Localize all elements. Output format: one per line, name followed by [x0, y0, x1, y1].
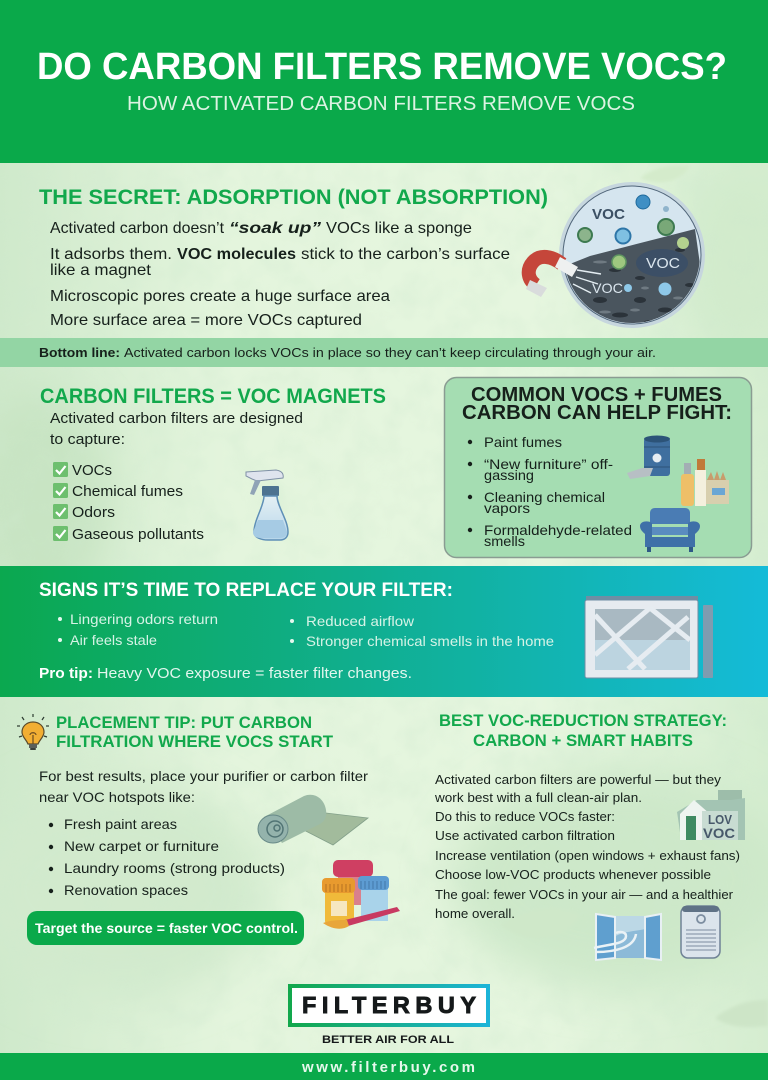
bullet list: Formaldehyde-related — [484, 522, 632, 538]
text block: “soak up” — [229, 220, 321, 237]
panel: best voc-reduction strategy — [434, 712, 745, 960]
bullet list: smells — [484, 533, 525, 549]
text block: Choose low-VOC products whenever possible — [435, 867, 711, 882]
heading: SIGNS IT’S TIME TO REPLACE YOUR FILTER: — [39, 580, 453, 601]
callout: target the source: Target the source = faster VOC control. — [35, 920, 298, 936]
icon: armchair — [640, 508, 700, 552]
bullet list: Paint fumes — [484, 434, 562, 450]
bullet list: gassing — [484, 467, 534, 483]
text block: Do this to reduce VOCs faster: — [435, 809, 615, 824]
icon: VOC magnet disc: VOC — [592, 206, 625, 223]
heading: FILTRATION WHERE VOCS START — [56, 733, 333, 751]
heading: COMMON VOCS + FUMES — [471, 384, 722, 406]
icon: VOC magnet disc — [526, 182, 710, 335]
panel: the secret adsorption — [0, 182, 768, 367]
logo — [290, 986, 488, 1046]
icon: VOC magnet disc: VOC — [592, 280, 623, 296]
text block: Microscopic pores create a huge surface area — [50, 288, 390, 305]
text block: Activated carbon filters are designed — [50, 410, 303, 427]
logo: BETTER AIR FOR ALL — [322, 1034, 454, 1046]
bullet list: Lingering odors return — [70, 611, 218, 627]
callout: bottom line: Bottom line: — [39, 345, 120, 360]
checklist — [53, 462, 204, 543]
bullet list — [468, 434, 632, 549]
callout: pro tip: Pro tip: — [39, 665, 93, 682]
magnet — [526, 257, 578, 297]
panel: voc magnets — [40, 385, 386, 543]
text block: Activated carbon doesn’t — [50, 220, 225, 237]
icon: chemical drum — [627, 436, 670, 479]
icon: VOC magnet disc: VOC — [646, 255, 680, 272]
text block: Use activated carbon filtration — [435, 828, 615, 843]
text block: More surface area = more VOCs captured — [50, 312, 362, 329]
bullet list: Cleaning chemical — [484, 489, 605, 505]
panel: common VOCs and fumes — [444, 378, 752, 558]
text block: For best results, place your purifier or carbon filter — [39, 768, 368, 784]
text block: Activated carbon filters are powerful — but they — [435, 772, 722, 787]
icon: air purifier — [681, 906, 720, 958]
text block: VOC molecules — [177, 246, 296, 263]
bullet list — [49, 816, 285, 898]
bullet list: Air feels stale — [70, 632, 157, 648]
heading: BEST VOC-REDUCTION STRATEGY: — [439, 712, 727, 730]
icon: low VOC house — [677, 790, 745, 841]
bullet list: “New furniture” off- — [484, 456, 613, 472]
heading — [462, 384, 732, 424]
heading — [56, 714, 333, 751]
bullet list: Reduced airflow — [306, 613, 415, 629]
heading: PLACEMENT TIP: PUT CARBON — [56, 714, 312, 732]
bullet list — [58, 611, 554, 649]
text block — [39, 768, 368, 805]
text block — [434, 772, 740, 921]
heading: THE SECRET: ADSORPTION (NOT ABSORPTION) — [39, 186, 548, 209]
callout: bottom line: Activated carbon locks VOCs in place so they can’t keep circulating through your air. — [124, 345, 656, 360]
bullet list: Renovation spaces — [64, 882, 188, 898]
icon: paint jars and brush — [322, 860, 400, 929]
checklist: Chemical fumes — [72, 483, 183, 500]
heading: CARBON FILTERS = VOC MAGNETS — [40, 385, 386, 408]
title: DO CARBON FILTERS REMOVE VOCS? — [37, 46, 727, 88]
icon: cleaning bottles — [681, 459, 729, 506]
callout: target the source — [27, 911, 304, 945]
heading: CARBON CAN HELP FIGHT: — [462, 402, 732, 424]
bullet list: Stronger chemical smells in the home — [306, 633, 554, 649]
checklist: Gaseous pollutants — [72, 526, 204, 543]
text block — [50, 410, 303, 448]
text block: work best with a full clean-air plan. — [434, 790, 642, 805]
text block: VOCs like a sponge — [326, 220, 472, 237]
text block: It adsorbs them. — [50, 246, 172, 263]
heading — [439, 712, 727, 750]
text block: stick to the carbon’s surface — [301, 246, 510, 263]
bullet list: Laundry rooms (strong products) — [64, 860, 285, 876]
callout: pro tip: Heavy VOC exposure = faster filter changes. — [97, 665, 412, 682]
bullet list: vapors — [484, 500, 530, 516]
checklist: VOCs — [72, 462, 112, 479]
icon: light bulb — [17, 714, 49, 750]
bullet list: Fresh paint areas — [64, 816, 177, 832]
icon: open window — [594, 914, 661, 960]
text block: Increase ventilation (open windows + exhaust fans) — [435, 848, 740, 863]
header band — [0, 0, 768, 163]
text block: near VOC hotspots like: — [39, 789, 195, 805]
panel: placement tip — [17, 714, 400, 945]
icon: carpet roll — [258, 795, 368, 845]
text block: to capture: — [50, 431, 125, 448]
logo: FILTERBUY — [302, 992, 476, 1018]
callout: bottom line — [0, 338, 768, 367]
text block: like a magnet — [50, 262, 152, 279]
checklist: Odors — [72, 504, 115, 521]
subtitle: HOW ACTIVATED CARBON FILTERS REMOVE VOCS — [127, 93, 635, 115]
text block: home overall. — [435, 906, 515, 921]
icon: low VOC house: LOV — [708, 812, 732, 827]
footer band: www.filterbuy.com — [301, 1059, 475, 1076]
footer band — [0, 1053, 768, 1080]
bullet list: New carpet or furniture — [64, 838, 219, 854]
text block: The goal: fewer VOCs in your air — and a healthier — [435, 887, 734, 902]
text block — [50, 220, 510, 329]
panel: signs it's time to replace — [0, 566, 768, 697]
icon: low VOC house: VOC — [703, 825, 735, 841]
icon: air filter — [585, 596, 713, 678]
icon: spray bottle — [246, 470, 288, 540]
heading: CARBON + SMART HABITS — [473, 732, 693, 750]
